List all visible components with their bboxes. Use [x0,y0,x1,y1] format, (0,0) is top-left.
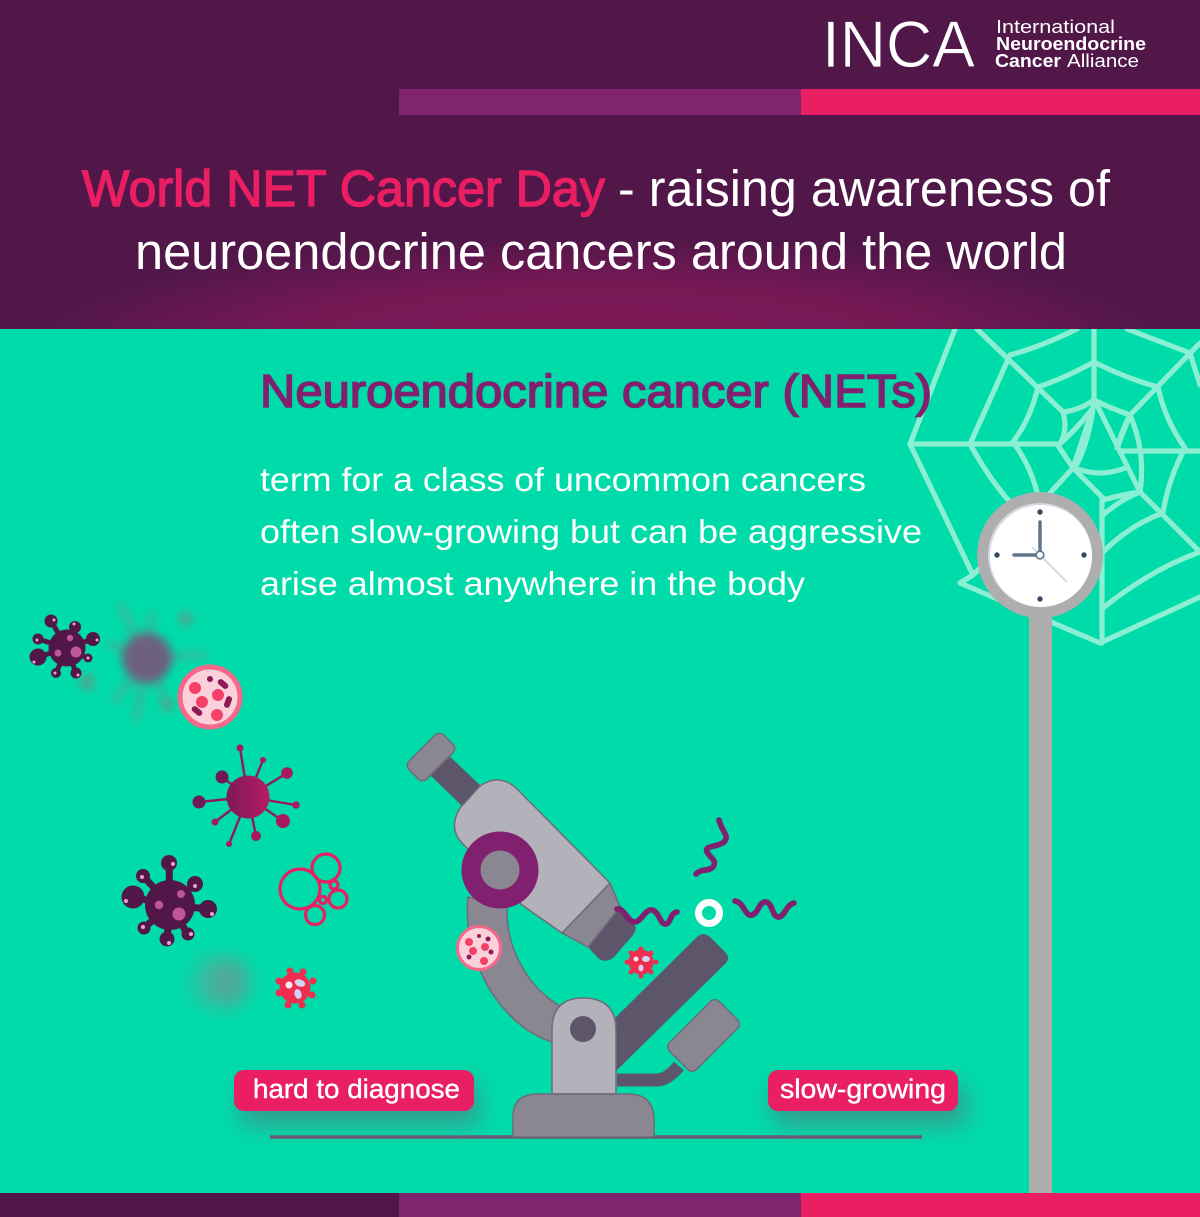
bubbles [280,854,347,924]
label: slow-growing: slow-growing [780,1074,946,1104]
body text: term for a class of uncommon cancers [260,461,866,498]
pink cell large [180,667,240,727]
clock on pole [977,492,1103,1193]
focus knob [462,832,538,908]
label shadows [240,1084,967,1126]
logo full name: Cancer [995,51,1061,71]
white ring [698,902,720,924]
stage pipe [617,1066,679,1080]
dark virus small [30,614,100,678]
label: slow-growing [768,1070,958,1111]
logo full name: Neuroendocrine [996,34,1146,54]
arm [467,897,562,1042]
red virus by objective [624,946,658,978]
ground line [270,1135,922,1139]
eyepiece tube [425,750,482,807]
header bars [399,89,1200,115]
blurred virus top [79,603,207,722]
eyepiece cap [405,731,457,783]
footer bars [0,1193,1200,1217]
squiggle right [735,901,794,917]
heading: Neuroendocrine cancer (NETs) [260,365,932,417]
base [513,1094,654,1137]
pillar [552,998,616,1094]
background panel [0,329,1200,1193]
logo [822,7,1146,81]
spiked virus [192,744,300,847]
pink cell small [458,926,500,970]
body text: arise almost anywhere in the body [260,565,806,602]
objective [588,905,636,961]
spider web [910,329,1200,643]
logo full name: International [996,17,1115,37]
red virus small [276,968,316,1008]
title: - raising awareness of [618,160,1111,217]
logo full name: Alliance [1067,51,1139,71]
squiggle left [617,909,677,924]
dark virus large [122,855,217,946]
body text [260,461,922,602]
title: World NET Cancer Day [82,160,605,217]
label: hard to diagnose: hard to diagnose [253,1074,460,1104]
label: hard to diagnose [234,1070,474,1111]
blurred virus bottom [190,956,249,1008]
microscope [270,731,922,1137]
title [82,160,1111,280]
logo wordmark: INCA [822,7,975,81]
squiggle top [696,820,726,874]
body [454,780,610,933]
nosepiece [562,883,620,947]
title: neuroendocrine cancers around the world [135,223,1067,280]
body text: often slow-growing but can be aggressive [260,513,922,550]
logo full name [995,17,1146,71]
condenser [665,997,742,1074]
header panel [0,0,1200,329]
stage [615,934,728,1071]
